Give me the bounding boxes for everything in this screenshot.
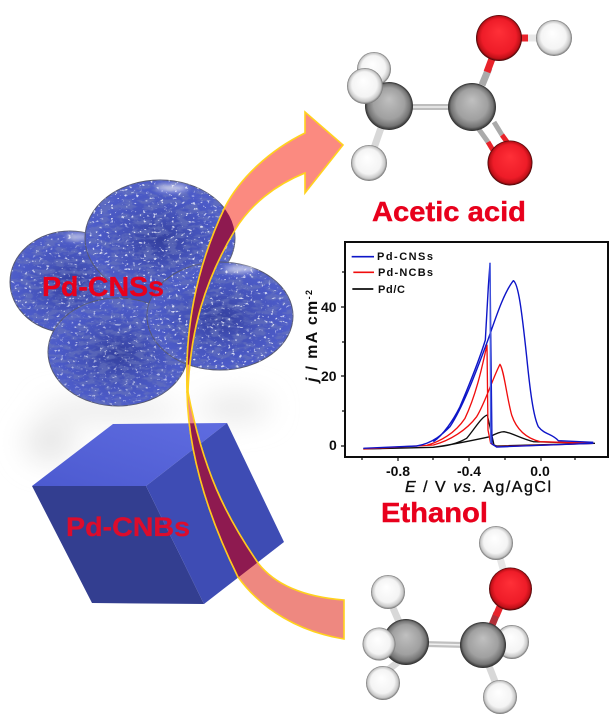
x tick labels: 0.0 (530, 463, 550, 479)
soft shadows below spheres (25, 396, 270, 462)
x tick labels: -0.4 (457, 463, 481, 479)
atom: hydroxyl oxygen (476, 15, 522, 61)
plot frame (345, 242, 608, 457)
legend labels: Pd-NCBs (378, 267, 433, 279)
atom: hydroxyl hydrogen (479, 526, 513, 560)
atom: methylene carbon (460, 622, 506, 668)
y axis title: -2 (304, 290, 314, 299)
sphere: right (147, 262, 293, 370)
atom: hydrogen lower (351, 145, 387, 181)
legend labels (377, 251, 433, 296)
legend swatches (352, 254, 374, 259)
y tick labels (321, 299, 337, 453)
curve: Pd-NCBs (363, 345, 593, 449)
molecule: ethanol (362, 526, 532, 714)
bonds (388, 558, 504, 684)
curve: Pd-CNSs (363, 263, 593, 448)
cube: Pd-CNBs (32, 423, 284, 604)
atom: hydrogen front (347, 68, 383, 104)
sphere: front (48, 298, 188, 406)
atom: hydrogen behind carbon (495, 625, 529, 659)
x tick labels (386, 463, 550, 479)
atom: methyl carbon (383, 619, 429, 665)
gap filler between spheres (121, 284, 169, 312)
bonds (374, 38, 538, 152)
sphere: top (85, 180, 235, 296)
y tick labels: 40 (321, 299, 337, 315)
atom: hydrogen back (357, 52, 391, 86)
atom: hydrogen lower right (483, 680, 517, 714)
axis ticks (341, 272, 575, 461)
y axis title: j / mA cm (304, 301, 321, 382)
heading: Ethanol: Ethanol (381, 497, 488, 528)
atom: carboxyl carbon (448, 83, 496, 131)
y tick labels: 0 (329, 437, 337, 453)
legend labels: Pd-CNSs (377, 251, 433, 263)
curves (352, 257, 595, 449)
nanosphere cluster: Pd-CNSs (10, 180, 293, 406)
atom: hydrogen left (362, 628, 396, 660)
atom: hydrogen lower left (366, 666, 400, 700)
sphere: left (10, 231, 130, 333)
label: Pd-CNBs: Pd-CNBs (66, 512, 190, 542)
label: Pd-CNSs: Pd-CNSs (42, 271, 164, 302)
x axis title: E / V vs. Ag/AgCl (405, 479, 551, 496)
atom: methyl carbon (365, 82, 413, 130)
x tick labels: -0.8 (386, 463, 410, 479)
molecule: acetic acid (347, 15, 572, 186)
atom: hydroxyl hydrogen (536, 20, 572, 56)
atom: oxygen (489, 568, 532, 610)
chart: cyclic voltammograms (304, 242, 608, 496)
curve: Pd/C (363, 415, 595, 449)
legend labels: Pd/C (378, 284, 405, 296)
y tick labels: 20 (321, 368, 337, 384)
arrow: ethanol to acetic acid through catalysts (187, 112, 344, 639)
atom: hydrogen upper left (371, 575, 405, 609)
atom: carbonyl oxygen (488, 140, 532, 186)
heading: Acetic acid: Acetic acid (372, 196, 526, 227)
